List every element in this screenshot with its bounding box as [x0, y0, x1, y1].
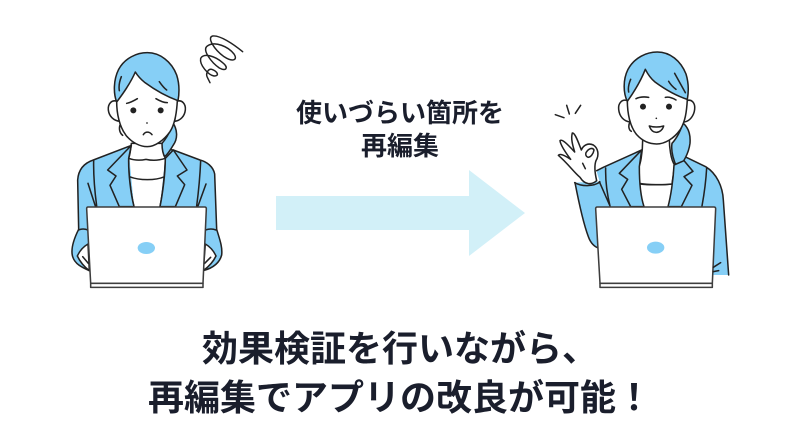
OK hand	[558, 133, 598, 184]
ponytail	[672, 123, 690, 168]
swirl	[201, 36, 243, 83]
face	[627, 70, 687, 144]
laptop	[87, 207, 206, 283]
neck	[639, 138, 675, 185]
jacket	[575, 150, 729, 275]
arrow	[276, 170, 525, 256]
hair	[114, 53, 179, 102]
hand lines right	[713, 263, 721, 272]
neck	[129, 143, 165, 160]
jacket	[72, 145, 222, 271]
heading: arrow caption	[296, 98, 504, 161]
face	[117, 72, 177, 147]
hair strands	[119, 77, 167, 135]
main title: 再編集でアプリの改良が可能！	[148, 377, 652, 418]
ears	[619, 100, 630, 122]
brows	[127, 99, 167, 103]
jacket seams	[79, 161, 216, 230]
nose	[655, 117, 657, 119]
heading: arrow caption: 再編集	[361, 131, 439, 161]
hair strands	[628, 73, 685, 131]
mouth	[143, 132, 152, 135]
shirt	[640, 183, 672, 207]
brows	[636, 97, 676, 100]
hand left	[77, 244, 89, 271]
lapels	[108, 145, 134, 207]
ears	[108, 101, 120, 121]
laptop logo	[647, 242, 664, 254]
hand right	[203, 244, 216, 271]
sparkle marks	[555, 105, 581, 118]
ponytail	[161, 123, 177, 157]
eyes	[640, 104, 646, 110]
heading: arrow caption: 使いづらい箇所を	[296, 98, 504, 128]
shirt	[129, 157, 165, 207]
main title	[148, 328, 652, 418]
nose	[146, 122, 148, 124]
hair	[624, 52, 688, 101]
figure: troubled woman at laptop	[72, 36, 243, 287]
smile	[649, 126, 664, 132]
eyes	[130, 107, 136, 113]
figure: happy woman at laptop	[555, 52, 729, 287]
laptop	[596, 207, 716, 283]
wrist cuff	[575, 182, 600, 186]
main title: 効果検証を行いながら、	[202, 328, 598, 369]
jacket seams	[599, 168, 707, 206]
lapels	[619, 150, 644, 207]
laptop logo	[138, 242, 155, 254]
